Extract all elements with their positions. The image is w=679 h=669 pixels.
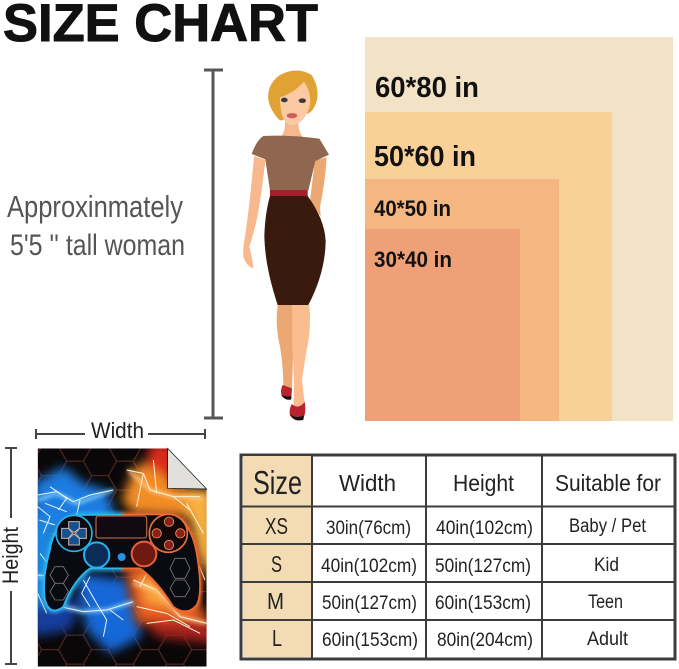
dress top (252, 136, 329, 191)
folded corner (168, 448, 207, 489)
d-pad ring (56, 515, 92, 551)
blanket size block: 60*80 (365, 37, 673, 421)
back leg (277, 305, 293, 388)
front leg (292, 305, 310, 410)
neck (280, 122, 303, 137)
belt (270, 190, 308, 196)
caption: woman height: Approxinmately (7, 189, 183, 224)
controller body (44, 514, 200, 611)
skirt (264, 196, 326, 305)
blue flames (30, 467, 142, 653)
row S (271, 551, 619, 577)
illustration: woman (243, 70, 329, 420)
blanket size block: 60*80: 60*80 in (375, 72, 479, 104)
face buttons (152, 517, 185, 550)
size table (241, 455, 675, 659)
back shoe (281, 385, 292, 399)
d-pad (62, 522, 86, 545)
row XS: Baby / Pet (569, 516, 647, 537)
row S: 40in(102cm) (321, 556, 417, 577)
height dimension (0, 448, 23, 664)
button ring (149, 514, 187, 552)
lightning glow (38, 470, 207, 623)
row L: 80in(204cm) (437, 630, 533, 651)
row XS: 40in(102cm) (436, 518, 533, 539)
row S: S (271, 551, 282, 577)
right arm (310, 157, 327, 217)
size column shading (243, 456, 311, 657)
hair (268, 70, 318, 121)
front shoe (290, 402, 305, 420)
header row: Width (339, 470, 396, 496)
background (38, 448, 207, 667)
mouth (287, 113, 297, 118)
width dimension (35, 418, 205, 443)
back sole (282, 395, 291, 400)
height ruler (204, 70, 223, 418)
row M: M (267, 588, 284, 614)
row XS (265, 513, 647, 539)
header row: Height (453, 470, 515, 496)
touchpad (96, 516, 147, 538)
header row (253, 464, 661, 501)
blanket size block: 50*60: 50*60 in (374, 141, 476, 173)
controller glow (44, 514, 200, 611)
row XS: XS (265, 513, 288, 539)
header row: Size (253, 464, 302, 501)
blanket size block: 50*60 (365, 112, 612, 421)
row M (267, 588, 623, 614)
row M: 50in(127cm) (322, 593, 417, 614)
row L (272, 625, 629, 651)
row L: 60in(153cm) (322, 630, 418, 651)
face (280, 82, 310, 126)
table background (241, 455, 675, 659)
blanket size block: 30*40 (365, 229, 520, 421)
centre button (118, 553, 126, 561)
width dimension: Width (91, 418, 144, 443)
controller hexes (50, 558, 190, 600)
caption: woman height (7, 189, 185, 262)
front sole (290, 414, 304, 420)
orange flames (122, 443, 213, 643)
left stick (84, 542, 109, 568)
row M: 60in(153cm) (435, 593, 531, 614)
row L: Adult (587, 629, 629, 650)
lightning (38, 460, 207, 637)
right stick (132, 542, 156, 566)
blanket product image: game controller (30, 443, 213, 667)
eyes (281, 98, 306, 103)
caption: woman height: 5'5 '' tall woman (10, 229, 185, 262)
row L: L (272, 625, 282, 651)
row M: Teen (588, 592, 623, 613)
blanket size block: 30*40: 30*40 in (374, 247, 452, 272)
left arm (243, 156, 265, 268)
header row: Suitable for (555, 470, 661, 496)
row XS: 30in(76cm) (326, 518, 411, 539)
row S: 50in(127cm) (435, 556, 531, 577)
blanket size block: 40*50 (365, 179, 559, 421)
row S: Kid (594, 555, 619, 576)
blanket size block: 40*50: 40*50 in (374, 196, 451, 221)
